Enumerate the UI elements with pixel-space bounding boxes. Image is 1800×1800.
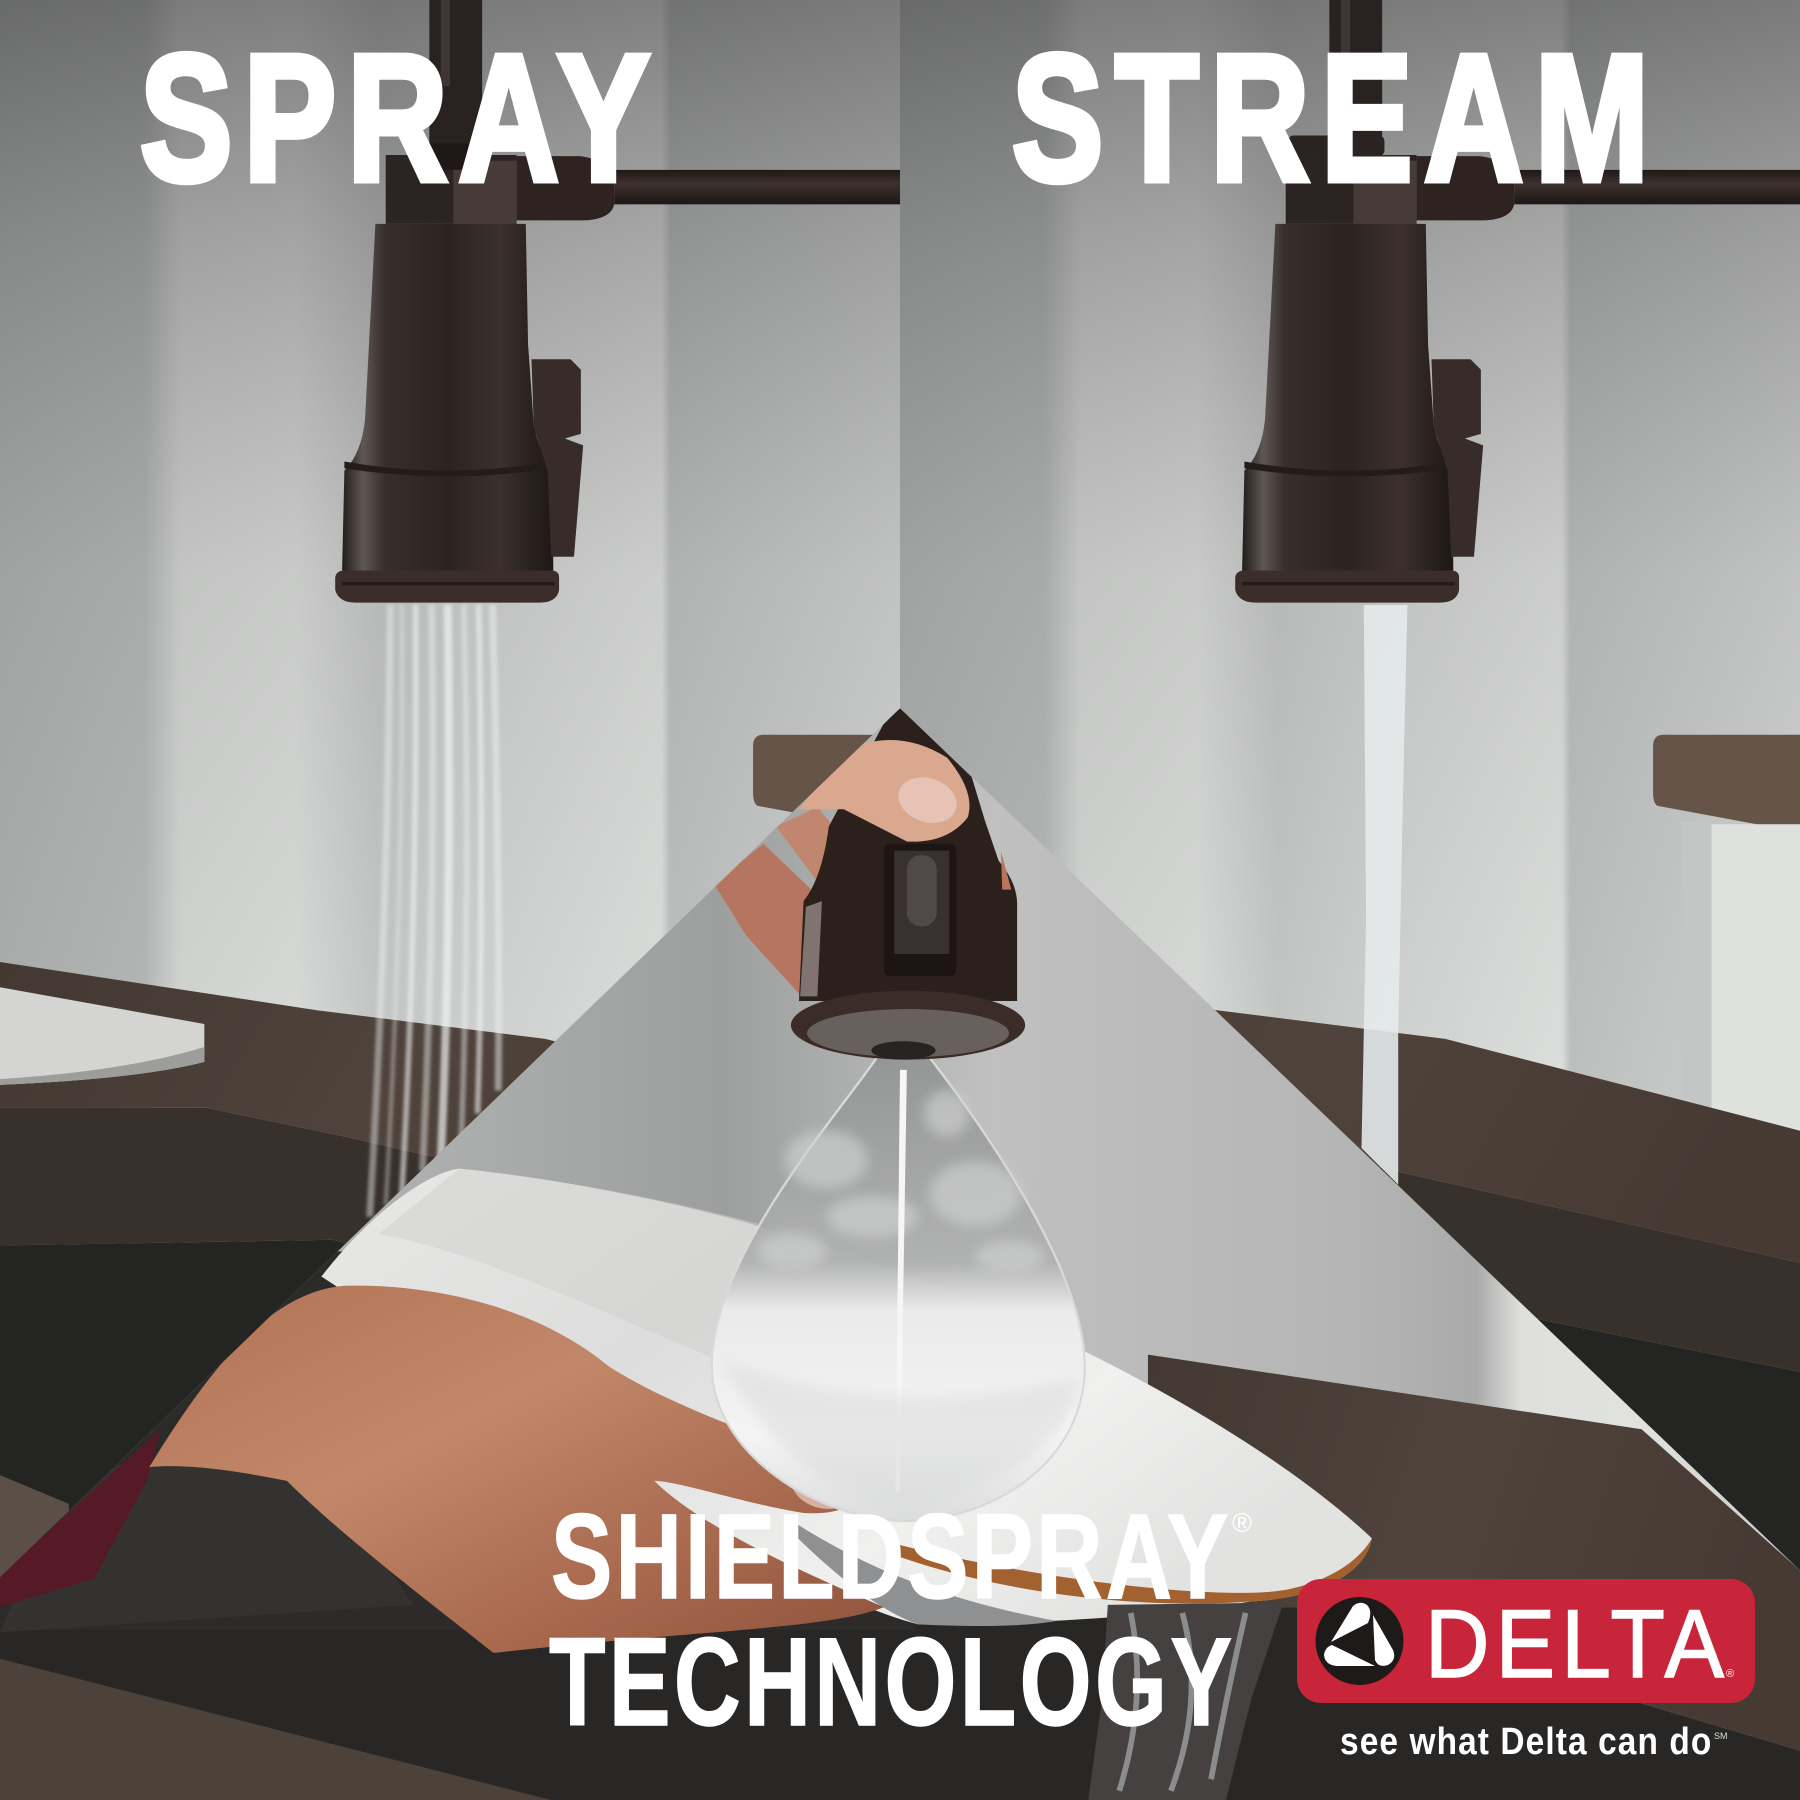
icon: delta triangle — [1316, 1597, 1404, 1685]
plate shade — [379, 1169, 758, 1366]
stream water — [1361, 605, 1407, 1185]
right counter — [1148, 1355, 1800, 1751]
spray bulb — [712, 1050, 1085, 1521]
panel: spray — [0, 0, 900, 1577]
finger nail — [892, 770, 963, 830]
sprayer head — [791, 708, 1025, 1060]
heading: technology: TECHNOLOGY — [549, 1612, 1232, 1752]
towel — [0, 1429, 161, 1607]
top finger — [799, 740, 969, 842]
thumb nail — [792, 1488, 834, 1509]
bulb mottling — [758, 1091, 1045, 1273]
left counter and sink — [0, 1251, 436, 1608]
service mark: SM — [1714, 1731, 1728, 1741]
nozzle — [871, 1041, 936, 1060]
plate rim — [895, 1538, 1372, 1604]
panel: stream — [900, 0, 1800, 1570]
panel: shieldspray triangle — [0, 689, 1800, 1800]
delta registered mark: ® — [1726, 1668, 1734, 1680]
plate underside — [792, 1521, 1056, 1626]
heading: shieldspray: SHIELDSPRAY — [551, 1489, 1228, 1624]
faucet spout collar — [430, 144, 470, 170]
triangle wall — [0, 689, 1800, 1800]
heading: spray: SPRAY — [140, 19, 650, 219]
delta wordmark: DELTA — [1425, 1590, 1724, 1698]
registered mark: ® — [1232, 1508, 1252, 1538]
button icon — [907, 855, 937, 926]
sprayer face — [807, 1009, 1009, 1057]
tagline: see what Delta can do — [1340, 1720, 1711, 1762]
bulb lower band — [734, 1370, 1074, 1492]
heading: stream: STREAM — [1012, 17, 1649, 218]
lower finger — [714, 844, 817, 996]
middle finger — [776, 807, 836, 882]
center jet — [895, 1070, 907, 1492]
faucet top cap — [1288, 135, 1384, 156]
runoff highlights — [1119, 1613, 1246, 1791]
sprayer button — [884, 844, 956, 976]
sink dark — [0, 1607, 1800, 1800]
sprayer rim — [791, 991, 1025, 1060]
delta logo badge — [1297, 1579, 1755, 1703]
right finger sliver — [1001, 852, 1011, 890]
lower hand — [149, 1286, 884, 1653]
water runoff — [1088, 1603, 1283, 1800]
spray water streams — [370, 605, 499, 1217]
plate — [321, 1169, 1372, 1624]
